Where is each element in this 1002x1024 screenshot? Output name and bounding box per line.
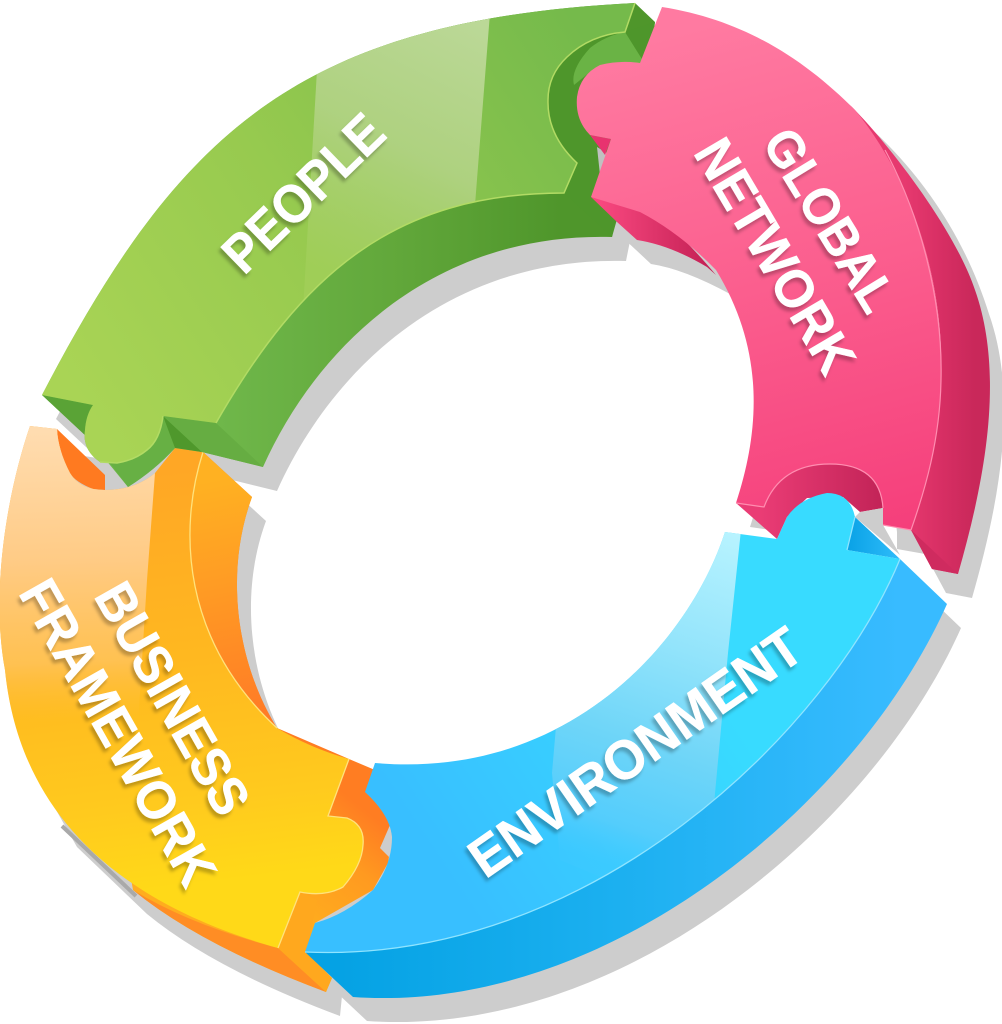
- gap shadow: [380, 825, 393, 857]
- yellow gloss: [0, 426, 155, 708]
- heading: PEOPLE: PEOPLE: [211, 102, 397, 285]
- panel: global network segment: [577, 7, 990, 574]
- blue top face: [305, 493, 900, 953]
- gap shadow: [855, 508, 900, 555]
- heading: ENVIRONMENT: ENVIRONMENT: [457, 615, 814, 889]
- green lower-left end wall: [42, 395, 93, 437]
- yellow outer contact shadow: [62, 826, 136, 896]
- green gloss: [306, 18, 490, 272]
- yellow outer front face: [133, 890, 326, 992]
- green side faces: [42, 3, 655, 487]
- yellow edge highlight: [190, 452, 363, 948]
- yellow inner side face: [190, 452, 277, 728]
- heading: FRAMEWORK: FRAMEWORK: [7, 569, 228, 896]
- green edge highlight: [100, 3, 635, 463]
- heading: GLOBAL: GLOBAL: [751, 118, 907, 323]
- blue gloss: [552, 525, 741, 885]
- green notch wall: [548, 22, 655, 237]
- panel: environment segment: [305, 493, 947, 998]
- green notch upper wall: [573, 32, 645, 85]
- gap shadow: [597, 147, 607, 175]
- yellow segment side faces: [100, 452, 392, 992]
- orange notch wall: [57, 429, 105, 490]
- green dark end triangle: [163, 416, 202, 452]
- yellow end face: [278, 892, 332, 992]
- pink notch wall: [736, 464, 883, 539]
- pink front wall: [591, 197, 716, 275]
- blue edge highlight: [305, 517, 900, 953]
- blue side face: [305, 559, 947, 998]
- yellow top face: [0, 426, 363, 948]
- pink top face: [577, 7, 941, 530]
- blue tab wall: [847, 517, 900, 559]
- heading: NETWORK: NETWORK: [682, 128, 867, 384]
- green end facet: [163, 416, 263, 467]
- pink end wall: [911, 530, 958, 574]
- green top face: [42, 3, 635, 463]
- green tab wall: [85, 416, 175, 487]
- pink outer side: [850, 105, 990, 574]
- panel: people segment: [42, 0, 655, 487]
- panel: business framework segment: [0, 420, 393, 992]
- pink tab wall: [590, 135, 611, 155]
- heading: BUSINESS: BUSINESS: [83, 572, 261, 825]
- pink edge highlight: [736, 150, 941, 530]
